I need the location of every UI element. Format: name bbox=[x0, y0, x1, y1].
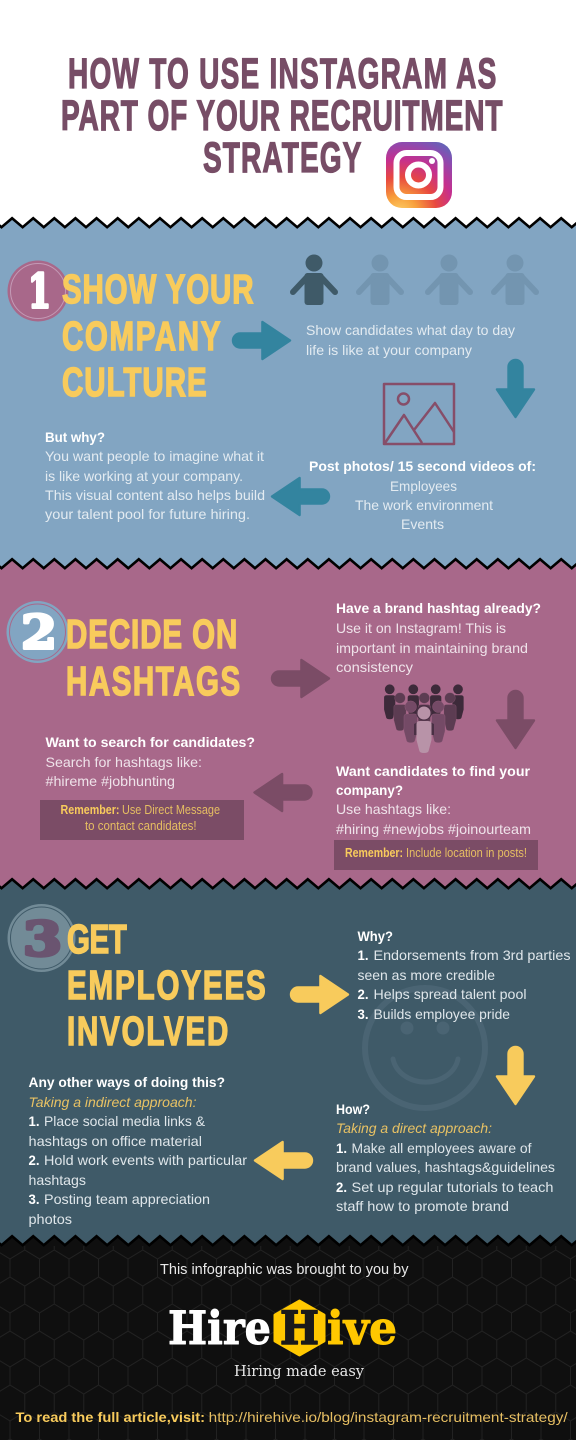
text: how: 2. bbox=[336, 1179, 347, 1195]
text: but why: You want people to imagine what it bbox=[45, 448, 264, 464]
heading: show your company culture: COMPANY bbox=[62, 313, 221, 359]
text: article link: To read the full article,visit: bbox=[16, 1409, 205, 1425]
text: any other ways: hashtags bbox=[28, 1172, 86, 1188]
arrow: right bbox=[291, 976, 348, 1013]
text: any other ways: Place social media links & bbox=[44, 1113, 206, 1129]
icon: four people, one highlighted bbox=[293, 254, 536, 305]
heading: get employees involved: INVOLVED bbox=[67, 1008, 228, 1054]
text: want candidates to find your company bbox=[336, 763, 531, 837]
title: STRATEGY bbox=[203, 133, 361, 181]
heading: get employees involved: GET bbox=[67, 916, 127, 962]
text: post photos list: The work environment bbox=[355, 497, 493, 513]
panel: white title header bbox=[0, 0, 576, 230]
text: brought to you by: This infographic was brought to you by bbox=[160, 1261, 409, 1278]
text: but why: This visual content also helps build bbox=[45, 487, 265, 503]
text: how: staff how to promote brand bbox=[336, 1198, 509, 1214]
text: how: Set up regular tutorials to teach bbox=[352, 1179, 554, 1195]
text: have a brand hashtag: Use it on Instagram! This is bbox=[336, 620, 506, 636]
text: why: seen as more credible bbox=[358, 967, 495, 983]
text: have a brand hashtag: consistency bbox=[336, 659, 413, 675]
text: have a brand hashtag: important in maintaining brand bbox=[336, 640, 528, 656]
text: why: Endorsements from 3rd parties bbox=[374, 947, 570, 963]
text: why: Why? bbox=[358, 928, 393, 944]
text: show candidates bbox=[306, 322, 515, 358]
text: how: Taking a direct approach: bbox=[336, 1120, 492, 1136]
text: but why bbox=[45, 429, 265, 522]
text: want to search for candidates bbox=[46, 734, 255, 789]
callout: remember location: Include location in posts! bbox=[406, 846, 527, 860]
text: why bbox=[358, 928, 570, 1022]
text: how: Make all employees aware of bbox=[352, 1140, 532, 1156]
panel: section 1 show your company culture bbox=[0, 218, 576, 570]
heading: decide on hashtags: HASHTAGS bbox=[66, 658, 240, 704]
text: but why: is like working at your company. bbox=[45, 468, 243, 484]
heading: show your company culture: SHOW YOUR bbox=[62, 266, 254, 312]
text: how: brand values, hashtags&guidelines bbox=[336, 1159, 555, 1175]
text: want candidates to find your company: Want candidates to find your bbox=[336, 763, 531, 779]
callout: remember direct message: to contact candidates! bbox=[85, 819, 196, 833]
text: any other ways: photos bbox=[28, 1211, 72, 1227]
text: any other ways: 1. bbox=[28, 1113, 40, 1129]
number badge 1 bbox=[8, 260, 68, 322]
arrow: right bbox=[272, 660, 329, 697]
text: article link: http://hirehive.io/blog/instagram-recruitment-strategy/ bbox=[209, 1409, 568, 1425]
panel: section 3 get employees involved bbox=[0, 879, 576, 1247]
title: HOW TO USE INSTAGRAM AS bbox=[68, 49, 496, 97]
arrow: left bbox=[254, 774, 312, 811]
callout: remember direct message: Remember: bbox=[60, 803, 120, 817]
text: why: Builds employee pride bbox=[374, 1006, 510, 1022]
arrow: left bbox=[255, 1142, 312, 1179]
text: any other ways: 3. bbox=[28, 1191, 40, 1207]
callout: remember location bbox=[334, 840, 538, 870]
text: any other ways: Hold work events with particular bbox=[44, 1152, 247, 1168]
text: post photos list: Events bbox=[401, 516, 444, 532]
heading: get employees involved bbox=[67, 916, 266, 1054]
arrow: right bbox=[233, 322, 290, 359]
text: but why: your talent pool for future hiring. bbox=[45, 506, 250, 522]
arrow: left bbox=[272, 478, 329, 515]
text: why: 1. bbox=[358, 947, 368, 963]
arrow: down bbox=[497, 360, 534, 417]
logo: hirehive: H bbox=[280, 1301, 319, 1355]
text: want candidates to find your company: company? bbox=[336, 782, 403, 798]
text: how: How? bbox=[336, 1101, 370, 1117]
title bbox=[61, 49, 503, 181]
text: article link bbox=[16, 1409, 568, 1425]
text: how bbox=[336, 1101, 555, 1214]
icon: instagram logo bbox=[386, 142, 452, 208]
text: why: 3. bbox=[358, 1006, 368, 1022]
number badge 3 bbox=[8, 904, 76, 972]
number badge 2 bbox=[6, 601, 68, 663]
text: want candidates to find your company: Use hashtags like: bbox=[336, 801, 451, 817]
callout: remember location: Remember: bbox=[345, 846, 403, 860]
heading: decide on hashtags: DECIDE ON bbox=[66, 611, 237, 657]
number badge 2: 2 bbox=[21, 606, 57, 660]
heading: show your company culture bbox=[62, 266, 254, 405]
heading: show your company culture: CULTURE bbox=[62, 359, 207, 405]
callout: remember direct message: Use Direct Message bbox=[122, 803, 220, 817]
text: any other ways: Taking a indirect approach: bbox=[28, 1094, 197, 1110]
text: show candidates: life is like at your company bbox=[306, 342, 472, 358]
text: any other ways: Any other ways of doing this? bbox=[28, 1074, 225, 1090]
text: post photos list bbox=[309, 458, 536, 532]
text: why: 2. bbox=[358, 986, 368, 1002]
panel: footer bbox=[0, 1236, 576, 1440]
title: PART OF YOUR RECRUITMENT bbox=[61, 91, 503, 139]
text: post photos list: Employees bbox=[390, 478, 457, 494]
logo: hirehive bbox=[168, 1301, 397, 1355]
text: show candidates: Show candidates what day to day bbox=[306, 322, 515, 338]
icon: faint smiley face bbox=[365, 988, 485, 1108]
text: any other ways: 2. bbox=[28, 1152, 40, 1168]
panel: section 2 decide on hashtags bbox=[0, 559, 576, 890]
text: any other ways: Posting team appreciation bbox=[44, 1191, 210, 1207]
text: any other ways: hashtags on office material bbox=[28, 1133, 202, 1149]
text: have a brand hashtag bbox=[336, 600, 541, 675]
logo: hirehive: Hire bbox=[168, 1301, 271, 1355]
text: post photos list: Post photos/ 15 second videos of: bbox=[309, 458, 536, 474]
text: want candidates to find your company: #hiring #newjobs #joinourteam bbox=[336, 821, 531, 837]
text: how: 1. bbox=[336, 1140, 347, 1156]
text: but why: But why? bbox=[45, 429, 105, 445]
number badge 3: 3 bbox=[23, 912, 62, 968]
text: any other ways bbox=[28, 1074, 247, 1227]
text: tagline: Hiring made easy bbox=[234, 1362, 364, 1380]
text: have a brand hashtag: Have a brand hashtag already? bbox=[336, 600, 541, 616]
heading: decide on hashtags bbox=[66, 611, 240, 704]
text: want to search for candidates: Search for hashtags like: bbox=[46, 754, 202, 770]
callout: remember direct message bbox=[40, 800, 244, 840]
icon: crowd of people bbox=[384, 684, 464, 753]
icon: picture frame bbox=[384, 384, 454, 444]
number badge 1: 1 bbox=[28, 264, 51, 320]
arrow: down bbox=[497, 1047, 534, 1104]
logo: hirehive: ive bbox=[327, 1301, 397, 1355]
text: want to search for candidates: Want to search for candidates? bbox=[46, 734, 255, 750]
text: why: Helps spread talent pool bbox=[374, 986, 526, 1002]
arrow: down bbox=[497, 691, 534, 748]
heading: get employees involved: EMPLOYEES bbox=[67, 962, 266, 1008]
text: want to search for candidates: #hireme #jobhunting bbox=[46, 773, 175, 789]
